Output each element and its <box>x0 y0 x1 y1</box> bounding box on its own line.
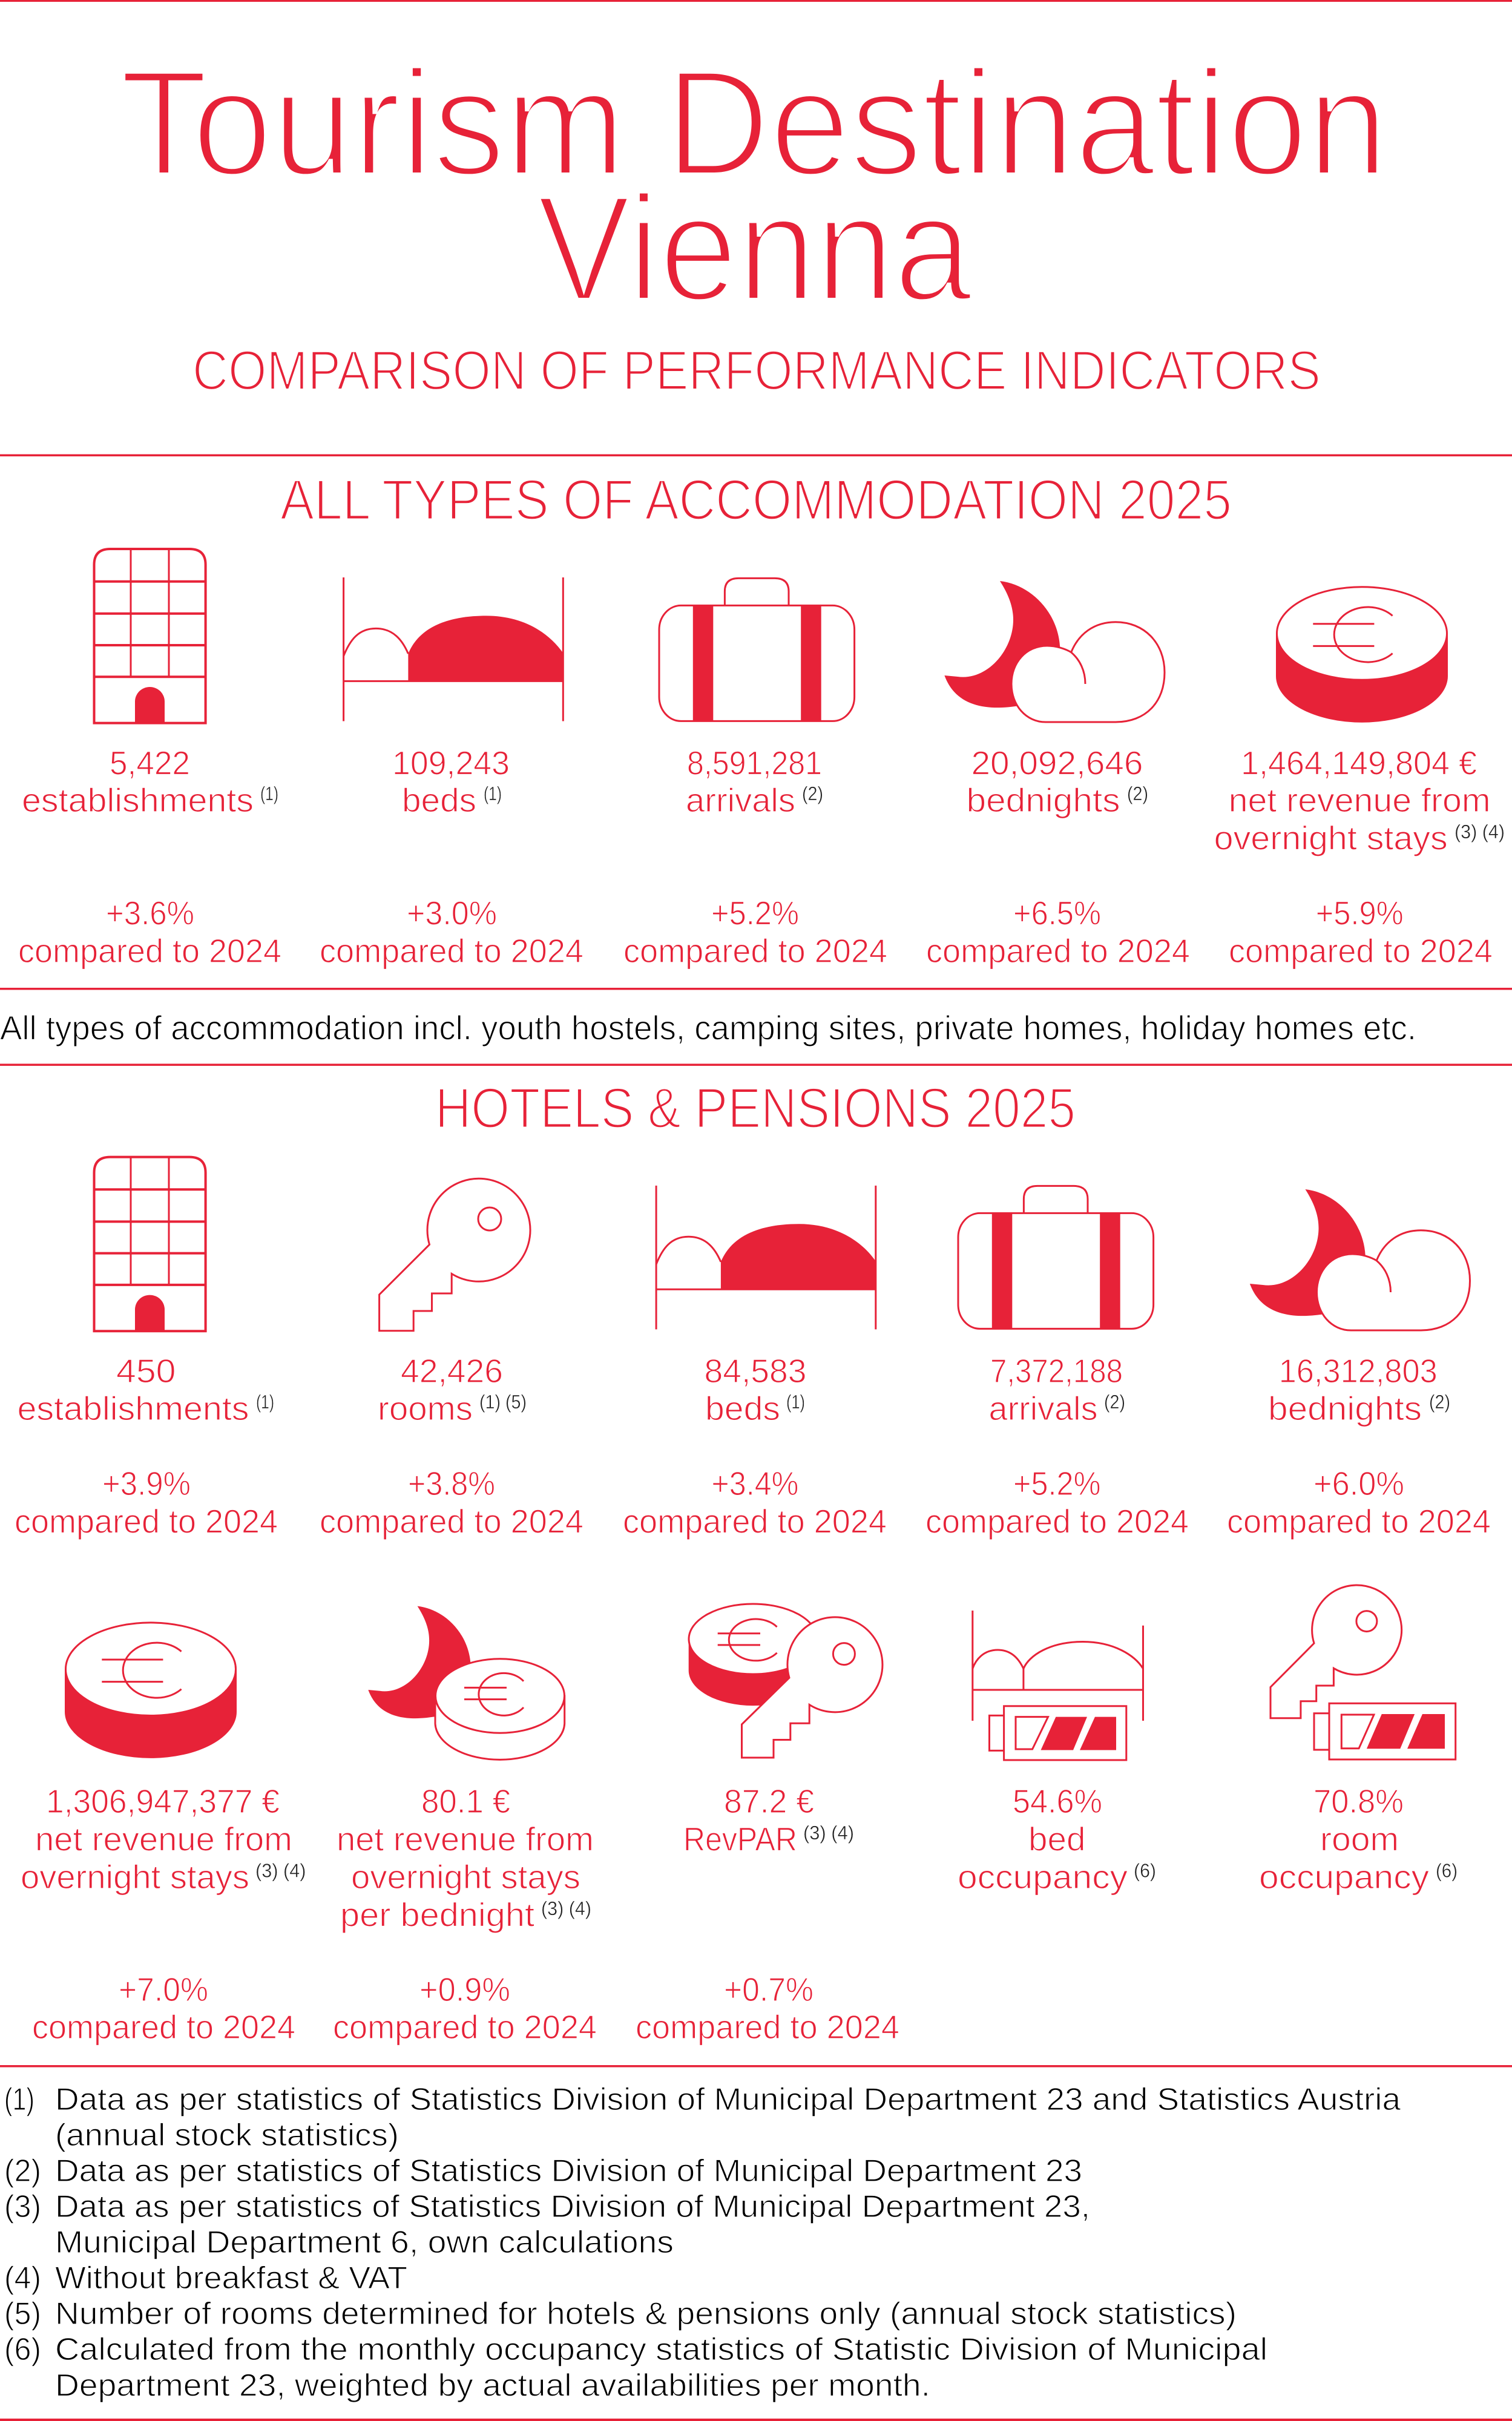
icon: building <box>94 1157 206 1331</box>
value: 20,092,646 <box>971 744 1143 782</box>
value: 1,306,947,377 € <box>46 1782 280 1820</box>
value: 87.2 € <box>724 1782 814 1820</box>
change <box>1229 895 1493 970</box>
stat: rooms <box>320 1178 583 1540</box>
footnotes: Without breakfast & VAT <box>55 2261 407 2296</box>
label <box>337 1821 594 1934</box>
value: 109,243 <box>392 744 510 782</box>
label: arrivals <box>989 1390 1098 1427</box>
label: occupancy <box>958 1858 1128 1896</box>
heading: all types of accommodation: ALL TYPES OF ACCOMMODATION 2025 <box>280 468 1232 531</box>
stat: bed occupancy <box>958 1611 1156 1896</box>
label: overnight stays <box>1214 820 1448 857</box>
label: (2) <box>802 783 823 804</box>
change: +3.9% <box>102 1465 191 1502</box>
footnotes: Number of rooms determined for hotels & pensions only (annual stock statistics) <box>55 2296 1237 2331</box>
change: +3.6% <box>106 895 194 932</box>
change: compared to 2024 <box>1229 932 1493 970</box>
label: arrivals <box>686 781 795 819</box>
label: overnight stays <box>351 1858 580 1896</box>
label: net revenue from <box>35 1821 292 1858</box>
change: +5.2% <box>1013 1465 1100 1502</box>
change: compared to 2024 <box>636 2008 899 2046</box>
note: scope of accommodation types: All types of accommodation incl. youth hostels, camping sites, private homes, holiday homes etc. <box>0 1008 1416 1046</box>
label: net revenue from <box>1229 781 1491 819</box>
value: 70.8% <box>1313 1782 1404 1820</box>
stat: RevPAR <box>636 1604 899 2046</box>
footnotes: (6) <box>4 2332 41 2367</box>
change: +3.0% <box>407 895 497 932</box>
label: bed <box>1028 1821 1086 1858</box>
icon: coin and key <box>689 1604 883 1758</box>
label <box>1214 781 1505 857</box>
stat: arrivals <box>623 578 887 970</box>
footnotes: Data as per statistics of Statistics Division of Municipal Department 23, <box>55 2189 1090 2224</box>
value: 8,591,281 <box>687 744 822 782</box>
label: (2) <box>1104 1391 1125 1413</box>
label: beds <box>705 1390 780 1427</box>
stat: bednights <box>1227 1189 1491 1540</box>
footnotes: (3) <box>4 2189 41 2224</box>
change: compared to 2024 <box>925 1502 1189 1540</box>
stat: bednights <box>926 581 1190 970</box>
stat: beds <box>623 1186 887 1540</box>
label: (3) (4) <box>803 1822 854 1844</box>
panel: all types of accommodation 2025 <box>18 468 1505 970</box>
change: +0.9% <box>419 1971 510 2008</box>
icon: building <box>94 549 206 723</box>
panel: hotels and pensions 2025 <box>15 1076 1491 2046</box>
stat: establishments <box>15 1157 278 1540</box>
label: (6) <box>1436 1859 1458 1881</box>
footnotes: (1) <box>4 2082 35 2117</box>
change <box>32 1971 295 2046</box>
stat: net revenue per bednight <box>333 1606 597 2046</box>
change <box>636 1971 899 2046</box>
value: 42,426 <box>401 1352 503 1390</box>
change: compared to 2024 <box>926 932 1190 970</box>
footnotes: (4) <box>4 2261 41 2296</box>
change <box>15 1465 278 1540</box>
label: overnight stays <box>21 1858 249 1896</box>
icon: suitcase <box>958 1186 1154 1329</box>
icon: bed <box>656 1186 876 1329</box>
label: occupancy <box>1259 1858 1430 1896</box>
change <box>926 895 1190 970</box>
footnotes: (5) <box>4 2296 41 2331</box>
change: compared to 2024 <box>333 2008 597 2046</box>
change: +7.0% <box>119 1971 208 2008</box>
change: +5.9% <box>1316 895 1404 932</box>
footnotes: (annual stock statistics) <box>55 2118 399 2153</box>
change: +3.4% <box>711 1465 798 1502</box>
label: (2) <box>1429 1391 1450 1413</box>
value: 450 <box>116 1352 176 1390</box>
label: room <box>1320 1821 1399 1858</box>
value: 16,312,803 <box>1279 1352 1438 1390</box>
label: rooms <box>378 1390 473 1427</box>
label: (1) (5) <box>479 1391 527 1413</box>
footnotes: (2) <box>4 2153 41 2189</box>
change <box>320 1465 583 1540</box>
change: +3.8% <box>408 1465 495 1502</box>
change <box>18 895 281 970</box>
footnotes <box>4 2082 1401 2403</box>
label: (6) <box>1134 1859 1156 1881</box>
change: compared to 2024 <box>32 2008 295 2046</box>
icon: euro coin <box>1276 587 1448 723</box>
stat: net revenue <box>1214 587 1505 970</box>
value: 7,372,188 <box>990 1352 1123 1390</box>
icon: bed and battery <box>973 1611 1143 1760</box>
label: per bednight <box>340 1896 534 1934</box>
footnotes: Calculated from the monthly occupancy statistics of Statistic Division of Municipal <box>55 2332 1267 2367</box>
stat: net revenue <box>21 1623 306 2046</box>
title: Tourism Destination <box>120 39 1388 207</box>
icon: moon and coin <box>368 1606 565 1759</box>
label: (1) <box>256 1391 274 1413</box>
heading: hotels and pensions: HOTELS & PENSIONS 2025 <box>435 1076 1076 1140</box>
stat: room occupancy <box>1259 1585 1458 1896</box>
label: (3) (4) <box>255 1859 306 1881</box>
change <box>623 1465 887 1540</box>
change <box>1227 1465 1491 1540</box>
subtitle: COMPARISON OF PERFORMANCE INDICATORS <box>192 340 1321 402</box>
label: (1) <box>786 1391 805 1413</box>
label: establishments <box>22 781 254 819</box>
label <box>21 1821 306 1896</box>
change <box>925 1465 1189 1540</box>
change: compared to 2024 <box>623 1502 887 1540</box>
title: Vienna <box>537 164 972 332</box>
icon: key and battery <box>1270 1585 1456 1759</box>
value: 1,464,149,804 € <box>1241 744 1477 782</box>
label: bednights <box>966 781 1120 819</box>
icon: key <box>380 1178 530 1331</box>
label: (1) <box>484 783 502 804</box>
icon: suitcase <box>659 578 855 721</box>
label: (3) (4) <box>1454 821 1505 843</box>
change <box>623 895 887 970</box>
label: beds <box>402 781 476 819</box>
footnotes: Data as per statistics of Statistics Division of Municipal Department 23 <box>55 2153 1082 2189</box>
change: +6.5% <box>1013 895 1101 932</box>
stat: arrivals <box>925 1186 1189 1540</box>
change: compared to 2024 <box>18 932 281 970</box>
label: (1) <box>260 783 278 804</box>
value: 54.6% <box>1013 1782 1102 1820</box>
label <box>1259 1821 1458 1896</box>
value: 84,583 <box>705 1352 806 1390</box>
icon: moon and cloud <box>944 581 1165 722</box>
change: compared to 2024 <box>15 1502 278 1540</box>
change: compared to 2024 <box>320 1502 583 1540</box>
value: 80.1 € <box>421 1782 510 1820</box>
label: bednights <box>1268 1390 1422 1427</box>
label: RevPAR <box>683 1821 797 1858</box>
value: 5,422 <box>110 744 190 782</box>
label: establishments <box>17 1390 249 1427</box>
label: net revenue from <box>337 1821 594 1858</box>
footnotes: Municipal Department 6, own calculations <box>55 2225 674 2260</box>
footnotes: Department 23, weighted by actual availabilities per month. <box>55 2368 930 2403</box>
label <box>378 1390 527 1427</box>
change: +6.0% <box>1313 1465 1404 1502</box>
change: +5.2% <box>711 895 799 932</box>
label: (2) <box>1127 783 1148 804</box>
label <box>958 1821 1156 1896</box>
change: +0.7% <box>724 1971 814 2008</box>
label: (3) (4) <box>541 1897 591 1919</box>
icon: moon and cloud <box>1250 1189 1470 1330</box>
title <box>120 39 1388 332</box>
change <box>333 1971 597 2046</box>
stat: establishments <box>18 549 281 970</box>
change: compared to 2024 <box>320 932 583 970</box>
icon: bed <box>344 577 564 721</box>
footnotes: Data as per statistics of Statistics Division of Municipal Department 23 and Statistics Austria <box>55 2082 1401 2117</box>
icon: euro coin <box>65 1623 237 1758</box>
change <box>320 895 583 970</box>
stat: beds <box>320 577 583 970</box>
change: compared to 2024 <box>623 932 887 970</box>
change: compared to 2024 <box>1227 1502 1491 1540</box>
